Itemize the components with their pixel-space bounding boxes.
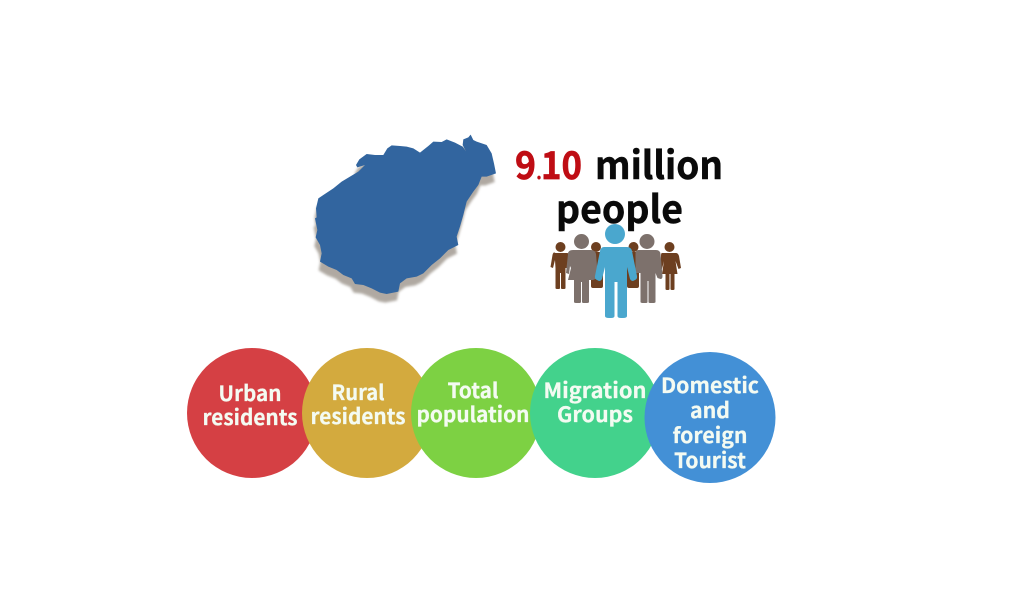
circle: total population: Total — [448, 375, 499, 405]
title: 9.10 million people: 10 — [541, 135, 582, 190]
circle: domestic and foreign tourist — [644, 352, 776, 483]
circle: migration groups: Groups — [557, 399, 633, 429]
icon: brown figure far left — [550, 242, 569, 289]
icon: grey figure left — [566, 234, 598, 303]
icon: brown figure far right — [660, 242, 681, 290]
map: Hainan island — [314, 135, 496, 303]
circle: domestic and foreign tourist: Tourist — [674, 445, 746, 475]
title: 9.10 million people: . — [536, 156, 542, 185]
circle row — [187, 348, 776, 483]
icon: grey figure right — [636, 234, 662, 303]
circle: domestic and foreign tourist: foreign — [672, 420, 748, 450]
circle: rural residents: Rural — [332, 377, 385, 407]
circle: rural residents: residents — [310, 401, 406, 431]
title: 9.10 million people — [515, 135, 723, 234]
circle: migration groups — [530, 348, 660, 478]
circle: migration groups: Migration — [544, 375, 646, 405]
title: 9.10 million people: people — [556, 179, 683, 234]
circle: domestic and foreign tourist: Domestic — [661, 370, 759, 400]
circle: urban residents: residents — [202, 402, 298, 432]
icon: blue figure centre — [595, 224, 637, 318]
icon: brown figures behind centre — [591, 242, 639, 288]
title: 9.10 million people: million — [595, 135, 723, 190]
circle: urban residents: Urban — [218, 378, 282, 408]
title: 9.10 million people: 9 — [515, 135, 536, 190]
circle: domestic and foreign tourist: and — [690, 395, 730, 425]
circle: total population — [411, 348, 541, 478]
circle: urban residents — [187, 348, 317, 478]
circle: rural residents — [302, 348, 432, 478]
circle: total population: population — [416, 399, 530, 429]
icon: group of people — [550, 224, 681, 318]
